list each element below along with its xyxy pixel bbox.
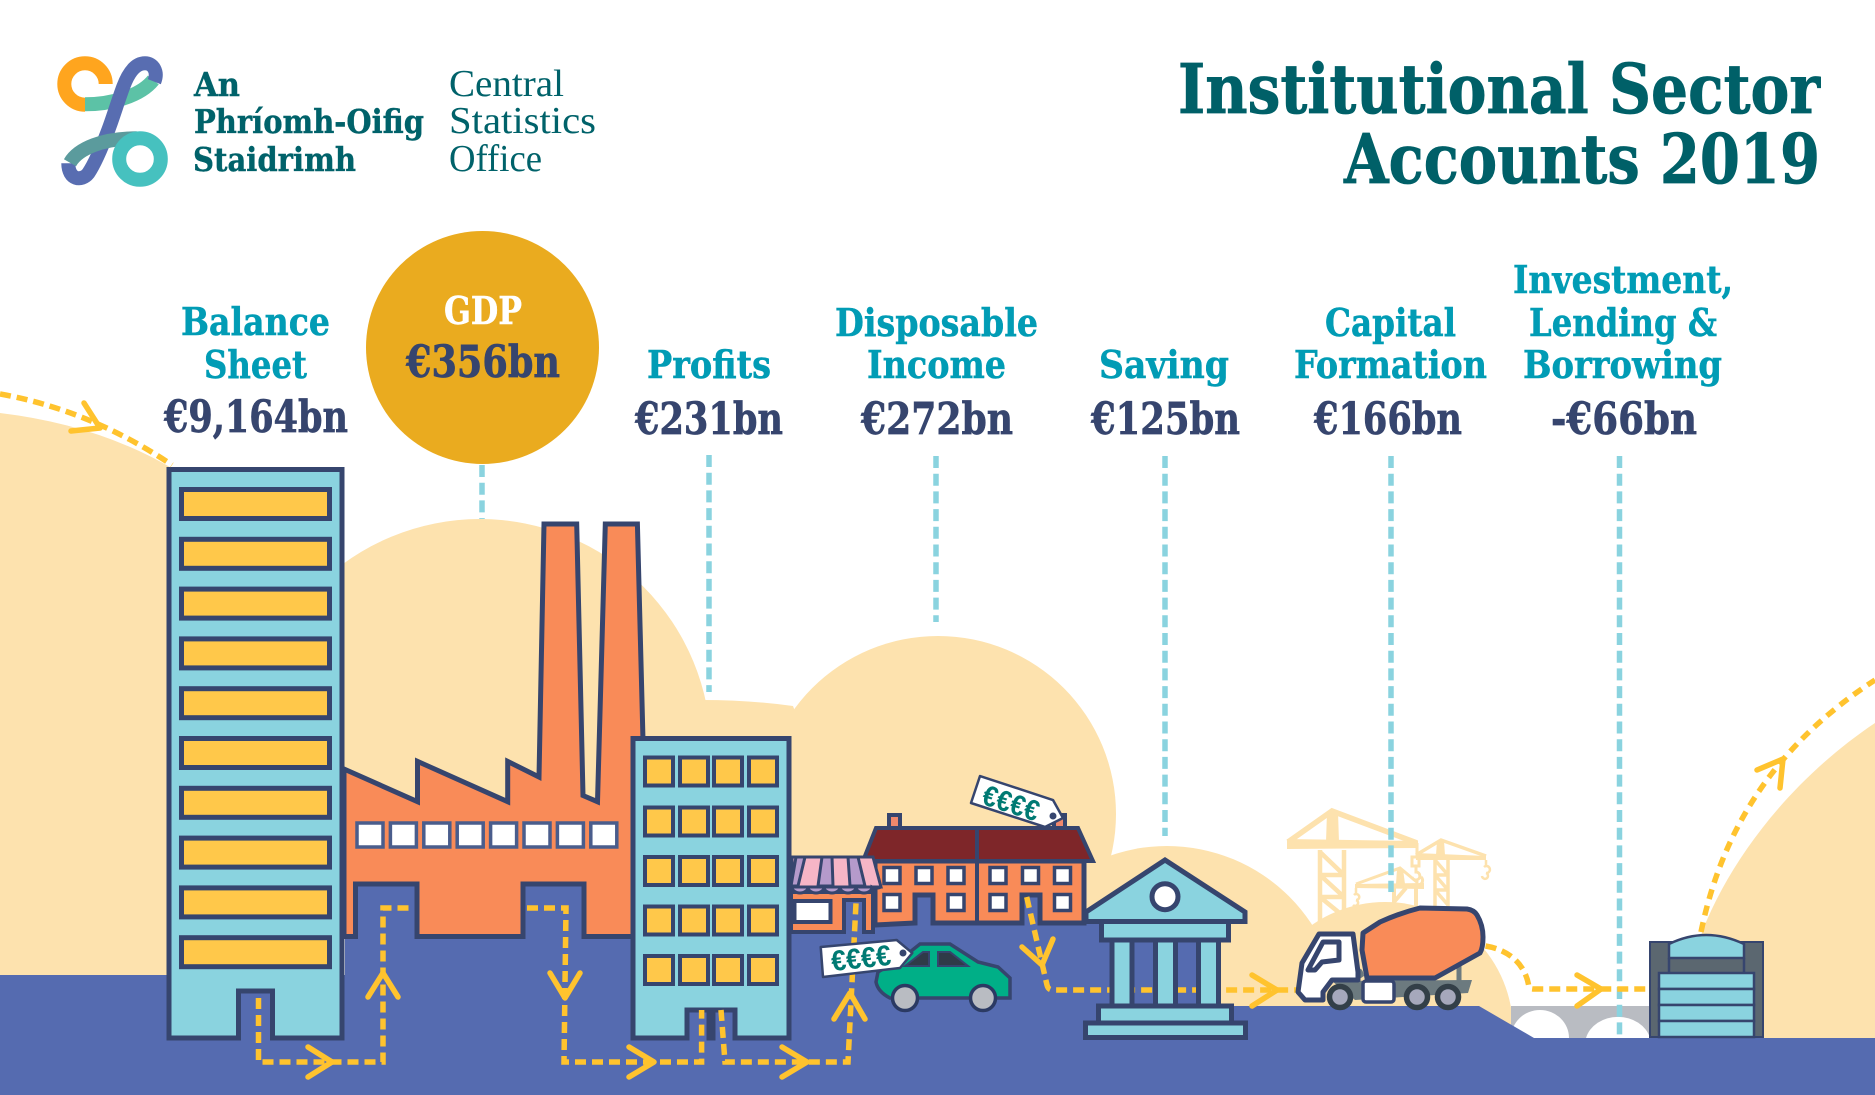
label: Balance Sheet: €9,164bn bbox=[163, 392, 348, 443]
arrowheads bbox=[308, 973, 865, 1077]
chimneys bbox=[889, 815, 1065, 837]
cement truck bbox=[1298, 908, 1483, 1008]
GDP circle: €356bn bbox=[405, 337, 560, 388]
logo text: Irish name bbox=[193, 65, 424, 179]
truck box bbox=[1363, 981, 1394, 1002]
houses bbox=[863, 815, 1093, 925]
mixer drum bbox=[1362, 908, 1483, 978]
crane: medium bbox=[1412, 840, 1490, 907]
cranes bbox=[1287, 811, 1490, 925]
logo: CSO infinity symbol bbox=[64, 63, 161, 180]
label: Balance Sheet bbox=[163, 299, 348, 443]
background hills bbox=[0, 413, 1875, 1095]
price tag: house: €€€€ bbox=[978, 780, 1043, 828]
label: Balance Sheet: Sheet bbox=[204, 342, 307, 387]
label: Saving: Saving bbox=[1099, 342, 1229, 387]
label: Saving: €125bn bbox=[1090, 394, 1240, 445]
shop bbox=[791, 857, 881, 932]
yellow flow path: truck to warehouse bbox=[1486, 946, 1649, 1006]
label: Capital Formation bbox=[1294, 300, 1487, 445]
logo text: English name: Office bbox=[449, 138, 542, 180]
label: Disposable Income: €272bn bbox=[860, 394, 1013, 445]
price tag: car: €€€€ bbox=[830, 940, 893, 978]
logo text: Irish name: An bbox=[193, 65, 240, 104]
label: Capital Formation: €166bn bbox=[1313, 394, 1462, 445]
logo text: English name: Statistics bbox=[449, 100, 596, 142]
connector lines from labels bbox=[482, 455, 1620, 1037]
label: Investment, Lending & Borrowing: Lending & bbox=[1529, 300, 1717, 345]
label: Profits bbox=[634, 342, 783, 445]
yellow flow path: entry from left bbox=[0, 394, 172, 465]
warehouse bbox=[1650, 935, 1763, 1037]
crane: small bbox=[1353, 868, 1424, 908]
factory windows bbox=[357, 823, 617, 847]
label: Balance Sheet: Balance bbox=[181, 299, 330, 344]
chassis bbox=[1332, 980, 1472, 1000]
label: Saving bbox=[1090, 342, 1240, 445]
tower windows bbox=[182, 490, 330, 967]
crane: large bbox=[1287, 811, 1419, 925]
logo text: Irish name: Staidrimh bbox=[193, 140, 356, 179]
label: Investment, Lending & Borrowing: Investment, bbox=[1513, 257, 1733, 302]
label: Investment, Lending & Borrowing: Borrowing bbox=[1523, 342, 1722, 387]
title bbox=[1178, 50, 1821, 200]
cab bbox=[1298, 934, 1358, 1000]
logo text: English name: Central bbox=[449, 63, 564, 105]
GDP circle: GDP bbox=[444, 288, 522, 333]
label: Disposable Income: Disposable bbox=[835, 300, 1038, 345]
label: Investment, Lending & Borrowing bbox=[1513, 257, 1733, 445]
GDP circle bbox=[366, 231, 599, 464]
label: Profits: €231bn bbox=[634, 394, 783, 445]
yellow flow path: house to truck bbox=[1022, 897, 1299, 1006]
tower block bbox=[169, 470, 342, 1038]
office windows bbox=[645, 758, 777, 984]
warehouse shutter bbox=[1659, 973, 1754, 1037]
yellow flow path: tower to office bbox=[258, 903, 865, 1077]
label: Disposable Income: Income bbox=[867, 342, 1006, 387]
label: Profits: Profits bbox=[647, 342, 771, 387]
logo text: Irish name: Phríomh-Oifig bbox=[194, 102, 424, 141]
shop awning bbox=[791, 857, 881, 893]
label: Disposable Income bbox=[835, 300, 1038, 445]
wheels bbox=[1330, 986, 1458, 1008]
yellow flow path: exit to right bbox=[1701, 680, 1875, 932]
price tag: house bbox=[971, 776, 1063, 828]
label: Capital Formation: Capital bbox=[1325, 300, 1456, 345]
office building bbox=[633, 738, 789, 1038]
ground bbox=[0, 883, 1875, 1095]
logo text: English name bbox=[449, 63, 596, 180]
house windows bbox=[884, 868, 1070, 910]
bridge bbox=[1511, 1006, 1651, 1039]
car bbox=[876, 944, 1010, 1010]
bank bbox=[1086, 860, 1246, 1038]
label: Capital Formation: Formation bbox=[1294, 342, 1487, 387]
factory bbox=[344, 524, 643, 936]
label: Investment, Lending & Borrowing: -€66bn bbox=[1551, 394, 1697, 445]
